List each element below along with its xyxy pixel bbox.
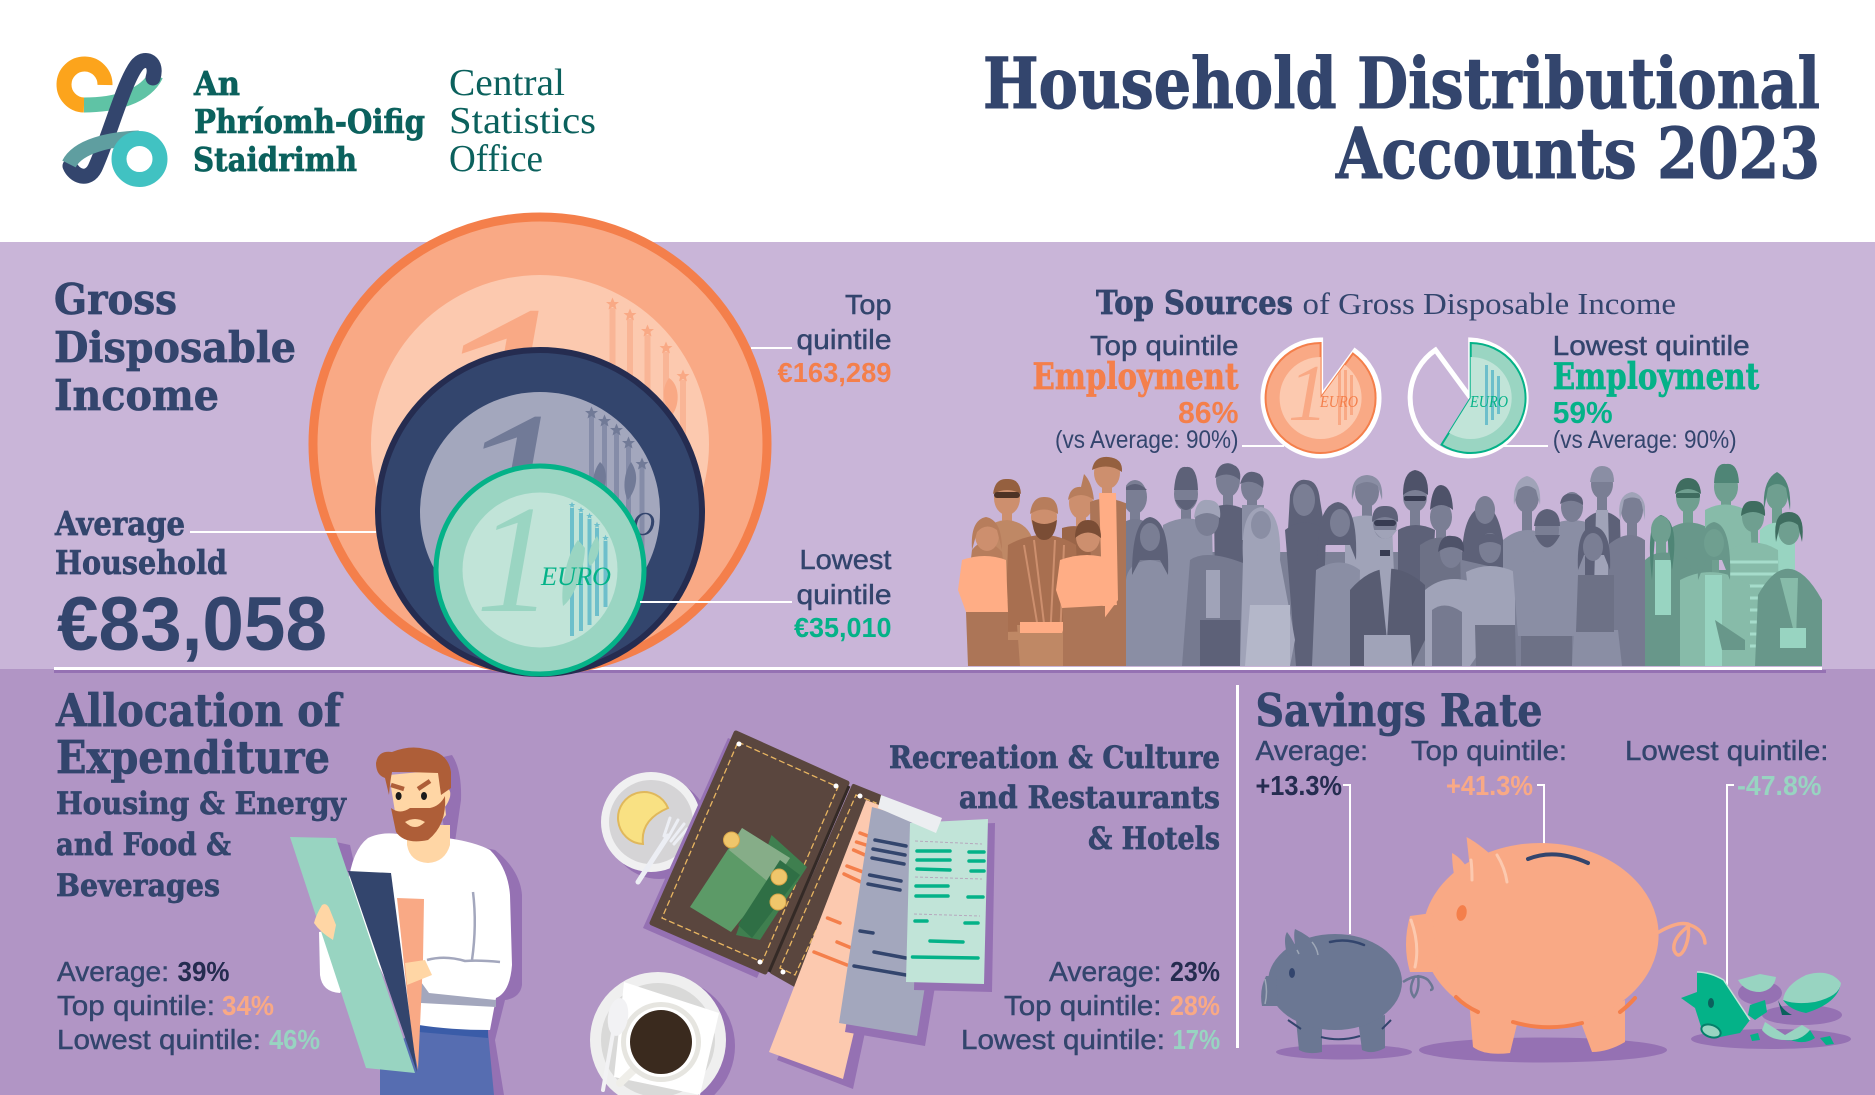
heading: top sources: Top Sources <box>1096 283 1293 322</box>
logo text: Irish name: Phríomh-Oifig <box>194 102 425 141</box>
stats: housing and food: Top quintile: <box>57 990 215 1021</box>
savings: average: Average: <box>1256 735 1368 766</box>
heading: allocation of expenditure <box>55 684 347 904</box>
heading: Gross Disposable Income: Income <box>54 371 219 420</box>
tape <box>878 795 942 833</box>
savings: lowest quintile: Lowest quintile: <box>1625 735 1828 766</box>
sweater <box>348 833 512 1030</box>
piggy bank: top quintile <box>1406 837 1705 1062</box>
receipt: green <box>906 819 995 992</box>
shadow <box>430 755 522 1095</box>
crowd: lowest quintile group <box>1645 464 1822 666</box>
lowest quintile employment text: Lowest quintile <box>1553 330 1750 361</box>
heading: allocation of expenditure: Allocation of <box>55 684 343 737</box>
callout: lowest quintile <box>640 544 892 643</box>
callout: average household: Household <box>55 543 227 582</box>
callout: top quintile <box>751 289 892 388</box>
coin: top quintile <box>313 217 767 671</box>
stats: housing and food: 39% <box>178 956 230 987</box>
heading: recreation and restaurants: Recreation & Culture <box>889 740 1220 776</box>
piggy bank: lowest quintile broken <box>1681 972 1851 1049</box>
heading: Gross Disposable Income <box>54 275 296 420</box>
savings: lowest quintile: -47.8% <box>1737 770 1822 801</box>
back row <box>1120 463 1650 666</box>
heading: top sources <box>1096 283 1676 322</box>
illustration: plate with lemon and fork <box>601 772 709 882</box>
logo text: Irish name <box>193 64 425 179</box>
top quintile employment text <box>1032 330 1284 454</box>
receipt: grey <box>839 807 960 1046</box>
pie: top quintile 86% <box>1263 340 1379 456</box>
callout: lowest quintile: Lowest <box>800 544 892 575</box>
illustration: man holding documents <box>290 748 522 1095</box>
logo text: English name: Central <box>449 62 565 104</box>
logo text: English name: Statistics <box>449 100 596 142</box>
logo: CSO <box>64 60 596 180</box>
stats: recreation and restaurants: 28% <box>1170 990 1220 1021</box>
hands <box>314 904 336 940</box>
stats: housing and food: 46% <box>269 1024 320 1055</box>
receipt: peach <box>769 800 910 1089</box>
callout: average household: €83,058 <box>57 582 327 667</box>
callout: average household <box>54 504 376 667</box>
illustration: receipts <box>769 795 995 1089</box>
coin: top quintile: 1 <box>420 238 580 592</box>
documents <box>397 898 424 1070</box>
stats: housing and food: Lowest quintile: <box>57 1024 261 1055</box>
heading: savings rate: Savings Rate <box>1256 684 1542 737</box>
savings: top quintile: Top quintile: <box>1411 735 1567 766</box>
stats: recreation and restaurants: 17% <box>1173 1024 1220 1055</box>
coin: average: EURO <box>569 506 655 543</box>
heading: Gross Disposable Income: Disposable <box>54 323 296 372</box>
illustration: wallet with cash <box>643 733 881 985</box>
callout: top quintile: Top <box>845 289 892 320</box>
top quintile employment text: Employment <box>1032 356 1239 398</box>
pie: top quintile 86%: 1 <box>1288 350 1328 438</box>
stats: recreation and restaurants: Top quintile: <box>1004 990 1162 1021</box>
coins: income comparison <box>313 217 767 674</box>
stats: recreation and restaurants: Lowest quintile: <box>961 1024 1165 1055</box>
front row <box>1126 500 1622 666</box>
callout: average household: Average <box>54 504 185 543</box>
logo text: Irish name: An <box>193 64 240 103</box>
heading: allocation of expenditure: Expenditure <box>56 731 330 784</box>
savings: top quintile <box>1411 735 1567 845</box>
stats: recreation and restaurants <box>961 956 1220 1055</box>
heading: top sources: of Gross Disposable Income <box>1302 286 1676 321</box>
pie: top quintile 86%: EURO <box>1319 392 1358 411</box>
stats: housing and food: 34% <box>222 990 274 1021</box>
callout: lowest quintile: €35,010 <box>794 612 892 643</box>
top quintile employment text: (vs Average: 90%) <box>1055 426 1238 454</box>
heading: Gross Disposable Income: Gross <box>54 275 177 324</box>
coin: lowest quintile <box>436 466 644 674</box>
callout: top quintile: quintile <box>796 324 892 355</box>
logo text: English name: Office <box>449 138 543 180</box>
savings: lowest quintile <box>1625 735 1828 985</box>
top quintile employment text: 86% <box>1178 395 1238 430</box>
piggy bank: average <box>1261 929 1433 1060</box>
stats: recreation and restaurants: 23% <box>1170 956 1220 987</box>
savings: top quintile: +41.3% <box>1446 770 1533 801</box>
jeans <box>380 1025 494 1095</box>
heading: recreation and restaurants <box>889 740 1220 857</box>
coins <box>724 832 787 910</box>
lowest quintile employment text: Employment <box>1553 356 1760 398</box>
coin: lowest quintile: EURO <box>540 562 611 591</box>
lowest quintile employment text: (vs Average: 90%) <box>1553 426 1737 454</box>
logo text: English name <box>449 62 596 180</box>
callout: top quintile: €163,289 <box>778 357 892 388</box>
savings: average: +13.3% <box>1256 770 1342 801</box>
stats: housing and food <box>57 956 320 1055</box>
stats: housing and food: Average: <box>57 956 169 987</box>
heading: allocation of expenditure: Housing & Energy <box>56 786 347 822</box>
crowd illustration <box>958 457 1822 666</box>
crowd: top quintile group <box>958 457 1130 666</box>
heading: allocation of expenditure: and Food & <box>56 827 231 863</box>
savings: average <box>1256 735 1368 934</box>
heading: recreation and restaurants: & Hotels <box>1088 821 1220 857</box>
heading: allocation of expenditure: Beverages <box>56 868 220 904</box>
illustration: coffee cup on plate <box>590 972 735 1095</box>
cash <box>690 828 807 940</box>
pie: lowest quintile 59%: EURO <box>1469 392 1508 411</box>
coin: lowest quintile: 1 <box>476 475 553 645</box>
logo mark <box>64 60 160 180</box>
lowest quintile employment text <box>1503 330 1760 454</box>
lowest quintile employment text: 59% <box>1553 395 1613 430</box>
crowd: average group <box>1120 463 1650 666</box>
top quintile employment text: Top quintile <box>1090 330 1238 361</box>
title <box>983 42 1820 195</box>
stats: recreation and restaurants: Average: <box>1049 956 1162 987</box>
logo text: Irish name: Staidrimh <box>193 140 357 179</box>
heading: recreation and restaurants: and Restaurants <box>959 780 1220 816</box>
coin: average <box>378 350 702 674</box>
callout: lowest quintile: quintile <box>796 579 892 610</box>
coin: average: 1 <box>452 361 572 627</box>
divider <box>1236 685 1239 1048</box>
neck and head <box>407 825 450 863</box>
pie: lowest quintile 59% <box>1410 340 1526 456</box>
